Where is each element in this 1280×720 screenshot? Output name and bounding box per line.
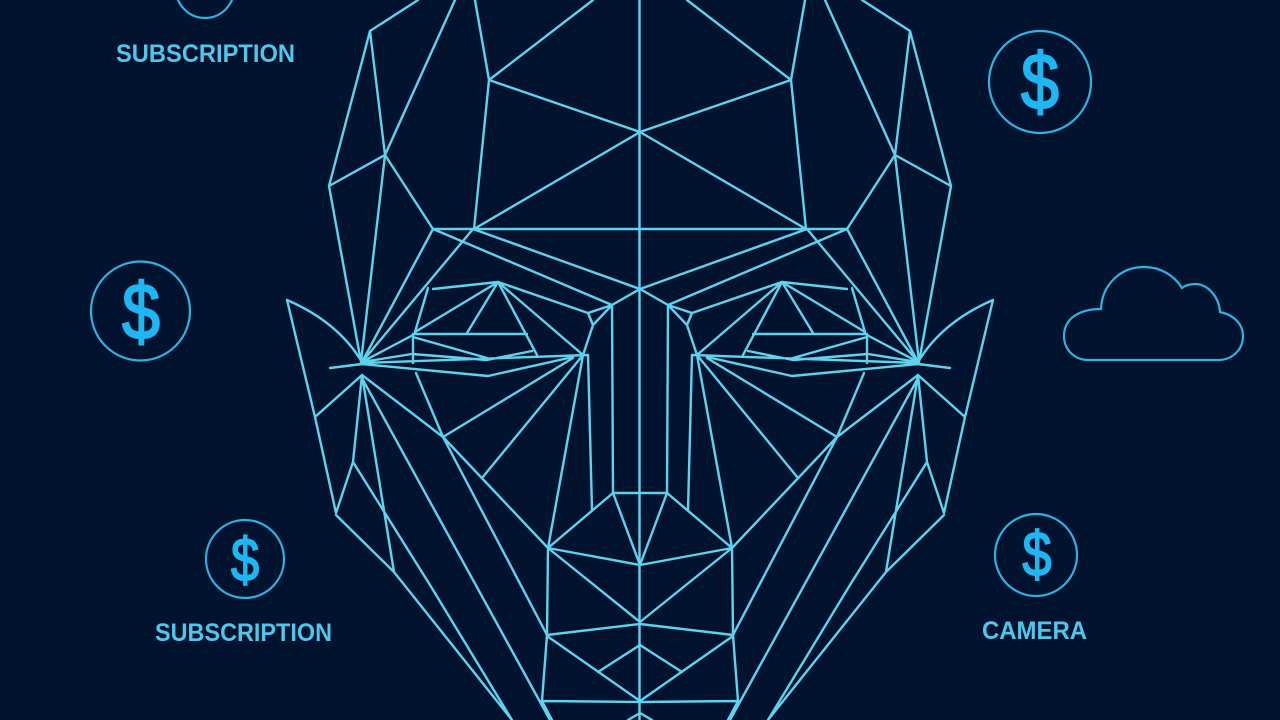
icon: dollar coin bottom left: $ <box>231 525 259 594</box>
label: subscription top: SUBSCRIPTION <box>116 40 295 68</box>
icon: dollar coin top right: $ <box>1021 37 1059 126</box>
icon: dollar coin left <box>91 262 190 360</box>
right half of face <box>640 0 993 720</box>
label: camera: CAMERA <box>982 617 1087 645</box>
label: subscription bottom: SUBSCRIPTION <box>155 619 332 647</box>
center line <box>638 0 641 720</box>
icon: dollar coin bottom left <box>206 520 284 598</box>
icon: dollar coin bottom right <box>995 514 1077 596</box>
icon: dollar coin left: $ <box>122 267 160 356</box>
icon: partial circle top left <box>176 0 234 18</box>
wireframe face mesh <box>287 0 993 720</box>
left half of face <box>287 0 640 720</box>
icon: dollar coin bottom right: $ <box>1022 519 1052 590</box>
icon: dollar coin top right <box>989 31 1091 133</box>
icon: cloud <box>1064 267 1243 360</box>
